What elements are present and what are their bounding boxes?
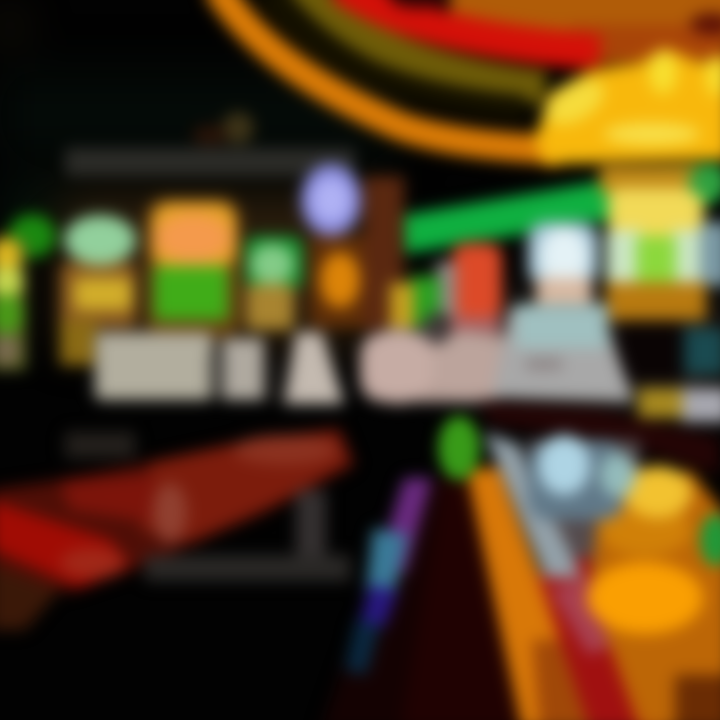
machine 2 — [60, 262, 136, 328]
slot machines row — [0, 164, 720, 382]
orange and red floor stripes — [466, 432, 665, 720]
brown post — [364, 176, 404, 330]
red machine — [446, 300, 500, 338]
ceiling arches — [216, 0, 720, 150]
red carpet left — [0, 428, 355, 630]
machine 3 — [146, 198, 240, 338]
centre floor reflections — [320, 470, 535, 720]
bright right machine — [600, 165, 700, 193]
right floor reflections — [528, 435, 720, 720]
green accent at right edge — [700, 514, 720, 566]
ambient background tints — [0, 11, 720, 400]
white machine — [528, 222, 598, 286]
blue top lamp — [301, 164, 361, 236]
green lit band — [8, 166, 720, 258]
yellow ceiling glow — [535, 48, 720, 164]
glowing sign letters — [95, 304, 634, 404]
machine 4 — [245, 236, 303, 290]
green floor glow — [438, 416, 480, 480]
dark sign band — [65, 112, 355, 176]
orange panel — [310, 236, 370, 328]
right counter edge — [480, 388, 720, 475]
left machine — [0, 240, 26, 370]
